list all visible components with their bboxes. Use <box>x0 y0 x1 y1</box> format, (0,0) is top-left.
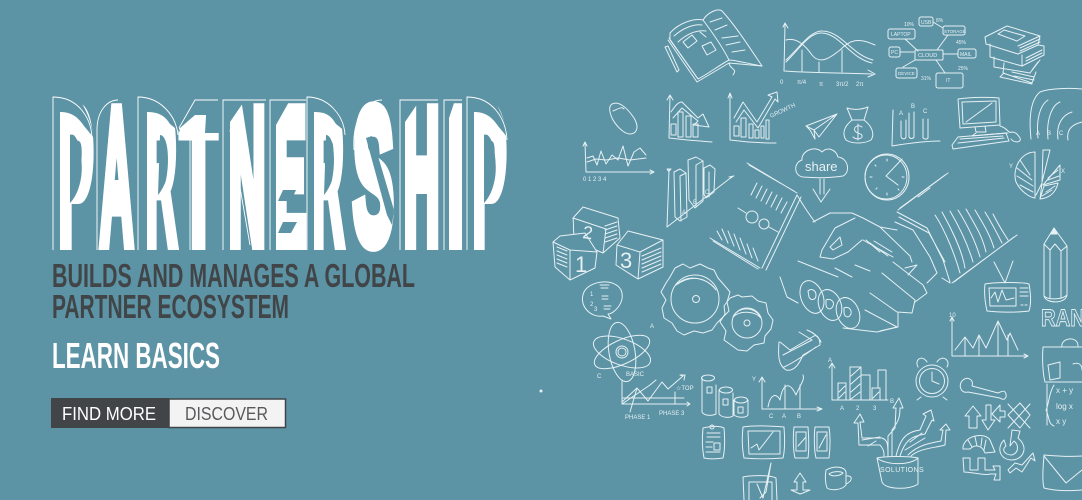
icon: hatched bar chart: 3 <box>873 406 877 412</box>
icon: handshake left sleeve <box>710 163 815 270</box>
icon: alarm clock <box>916 358 948 400</box>
icon: hatched bar chart <box>828 358 894 412</box>
icon: cloud network diagram: LAPTOP <box>891 32 911 38</box>
icon: magnet arch chart: B <box>1047 131 1051 137</box>
icon: hatched bar chart: 2 <box>856 406 860 412</box>
icon: growth chart <box>728 92 797 143</box>
icon: A B line chart: A <box>782 414 786 420</box>
decorative dots <box>540 390 542 392</box>
icon: speech bubble: 3 <box>594 307 598 313</box>
icon: wave chart: π/4 <box>797 80 807 86</box>
icon: A B line chart <box>752 375 822 420</box>
icon: computer <box>952 97 1020 149</box>
button: find more: FIND MORE <box>62 404 156 424</box>
icon: speech bubble: 1 <box>590 292 594 298</box>
icon: magnet arch chart <box>1030 88 1082 140</box>
title: PARTNERSHIP: R <box>313 71 344 283</box>
icon: wave chart: 0 <box>780 80 784 86</box>
icon: mountain chart: 10 <box>949 313 956 319</box>
title: PARTNERSHIP: N <box>229 71 266 283</box>
title: PARTNERSHIP: P <box>58 70 93 283</box>
icon: pie chart <box>1009 150 1065 199</box>
button group <box>51 398 286 428</box>
icon: wave chart: 2π <box>856 82 863 88</box>
title: PARTNERSHIP: S <box>353 70 394 282</box>
icon: cloud network diagram: 8% <box>936 18 944 24</box>
icon: atom: C <box>597 374 602 380</box>
icon: growth chart with phases: PHASE 3 <box>659 411 685 417</box>
icon: mountain chart <box>949 313 1028 358</box>
subtitle line 2: PARTNER ECOSYSTEM <box>52 288 289 325</box>
icon: arrow symbols <box>965 403 1030 430</box>
icon: 3D bar chart: B <box>693 200 697 206</box>
icon: atom: A <box>650 324 654 330</box>
icon: numbered dice: 3 <box>620 248 632 273</box>
icon: retro television <box>985 261 1030 312</box>
icon: pencil <box>1044 228 1067 302</box>
icon: up and down arrow <box>791 473 810 494</box>
icon: bars with axis: B <box>911 104 915 110</box>
icon: bars with axis <box>892 104 940 146</box>
icon: atom <box>589 320 655 384</box>
title: PARTNERSHIP: I <box>447 70 464 283</box>
icon: wave chart: π <box>819 82 823 88</box>
icon: cloud network diagram: 45% <box>956 40 967 46</box>
icon: growth chart with phases <box>622 372 694 421</box>
icon: briefcase with formulas: log x <box>1056 402 1073 411</box>
icon: wrench <box>960 378 1006 399</box>
icon: briefcase with formulas: x y <box>1056 417 1066 426</box>
icon: cloud network diagram: DEVICE <box>898 71 915 76</box>
title: PARTNERSHIP <box>53 69 508 283</box>
icon: wave chart <box>780 23 875 88</box>
title: PARTNERSHIP: R <box>146 71 177 283</box>
button: discover <box>169 399 286 428</box>
icon: cloud network diagram: PC <box>891 50 898 56</box>
icon: cloud network diagram: CLOUD <box>918 53 937 59</box>
icon: wave chart: 3π/2 <box>836 82 849 88</box>
icon: bars with axis: C <box>923 109 928 115</box>
icon: growth chart with phases: ☆TOP <box>676 385 694 392</box>
icon: arrow bar chart <box>667 95 712 142</box>
icon: numbered dice: 1 <box>575 252 587 277</box>
icon: briefcase with formulas: x + y <box>1056 386 1073 395</box>
icon: bars with axis: A <box>899 111 903 117</box>
icon: share cloud <box>796 149 848 202</box>
icon: numbered dice: 2 <box>581 222 594 243</box>
icon: small gear <box>720 295 773 351</box>
subtitle <box>52 257 415 325</box>
icon: cloud network diagram: 25% <box>958 66 969 72</box>
icon: share cloud: share <box>805 159 838 174</box>
icon: glasses <box>779 330 821 370</box>
heading: learn basics: LEARN BASICS <box>52 335 220 376</box>
icon: coin cylinders <box>702 375 748 417</box>
icon: pie chart: X <box>1061 169 1065 175</box>
icon: smartphones <box>793 427 830 458</box>
icon: 3D bar chart: A <box>682 210 686 216</box>
icon: stack of books <box>985 26 1044 84</box>
button: find more <box>51 398 169 428</box>
icon: A B line chart: B <box>797 414 801 420</box>
icon: wall clock <box>865 154 909 200</box>
icon: magnet arch chart: C <box>1059 131 1064 137</box>
icon: envelope <box>1043 455 1082 491</box>
icon: cloud network diagram <box>888 17 976 88</box>
icon: cloud network diagram: USB <box>921 20 932 26</box>
icon: computer mouse <box>610 103 637 134</box>
icon: cloud network diagram: STORAGE <box>944 29 966 34</box>
icon: 3D bar chart <box>667 157 734 227</box>
icon: large gear <box>661 264 730 335</box>
icon: cloud network diagram: IT <box>946 78 950 84</box>
icon: magnet arch chart: A <box>1036 131 1040 137</box>
icon: solutions cup with arrows: SOLUTIONS <box>880 467 924 474</box>
icon: hatched bar chart: B <box>890 399 894 405</box>
icon: A B line chart: C <box>769 414 774 420</box>
icon: handshake right sleeve <box>895 173 1017 283</box>
icon: speech bubble <box>582 282 622 319</box>
title: PARTNERSHIP: A <box>100 72 133 283</box>
icon: briefcase with formulas <box>1043 339 1082 426</box>
icon: growth chart with phases: BASIC <box>626 372 645 378</box>
icon: paper plane <box>806 114 837 139</box>
icon: pie chart: Y <box>1009 164 1013 170</box>
title: PARTNERSHIP: H <box>404 71 440 283</box>
icon: solutions cup with arrows <box>854 398 950 488</box>
icon: hatched bar chart: A <box>828 358 832 364</box>
icon: cloud network diagram: MAIL <box>960 52 972 58</box>
icon: handshake hands <box>780 213 927 332</box>
icon: money bag <box>844 107 873 143</box>
icon: open book <box>665 10 762 82</box>
icon: growth chart: GROWTH <box>769 103 797 120</box>
icon: checkbox <box>743 463 777 500</box>
icon: curved arrows <box>963 430 1035 480</box>
icon: growth chart with phases: PHASE 1 <box>625 415 651 421</box>
icon: tablet <box>742 426 785 459</box>
icon: speech bubble: 2 <box>590 302 594 308</box>
title: PARTNERSHIP: T <box>180 69 217 282</box>
button: discover: DISCOVER <box>185 404 268 424</box>
icon: coffee cup <box>825 467 851 490</box>
subtitle line 1: BUILDS AND MANAGES A GLOBAL <box>52 257 415 294</box>
icon: 3D bar chart: C <box>705 190 710 196</box>
title: PARTNERSHIP: E <box>275 72 306 283</box>
icon: hatched bar chart: A <box>840 406 844 412</box>
icon: cloud network diagram: 31% <box>921 76 932 82</box>
icon: numbered dice <box>553 207 663 280</box>
icon: line chart: 0 1 2 3 4 <box>583 177 607 183</box>
icon: cloud network diagram: 10% <box>904 22 915 28</box>
icon: clipboard <box>702 425 725 459</box>
title: PARTNERSHIP: P <box>472 70 506 283</box>
icon: line chart <box>583 142 654 183</box>
icon: A B line chart: Y <box>752 377 756 383</box>
